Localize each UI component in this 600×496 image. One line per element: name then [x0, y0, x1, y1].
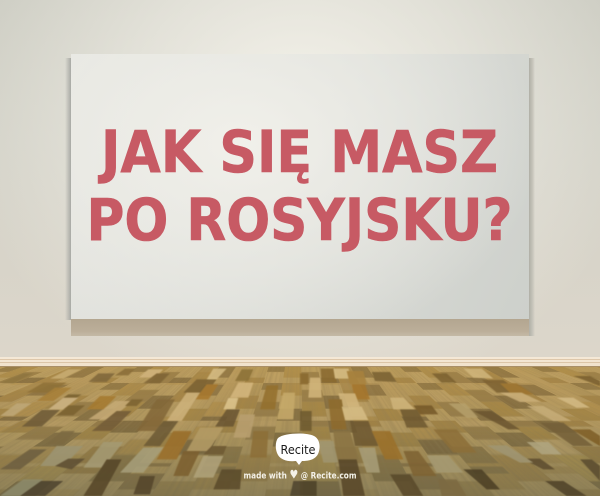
parquet floor — [0, 366, 600, 496]
panel: wall canvas — [71, 54, 529, 319]
baseboard — [0, 357, 600, 367]
icon: speech bubble: Recite — [280, 443, 316, 457]
title: JAK SIĘ MASZ — [98, 118, 498, 186]
Recite logo and credit — [244, 434, 356, 482]
canvas shadow right — [529, 58, 535, 336]
canvas shadow left — [65, 58, 71, 320]
canvas shadow below — [71, 319, 532, 336]
title: PO ROSYJSKU? — [87, 187, 512, 254]
wall — [0, 0, 600, 358]
title — [87, 118, 512, 254]
